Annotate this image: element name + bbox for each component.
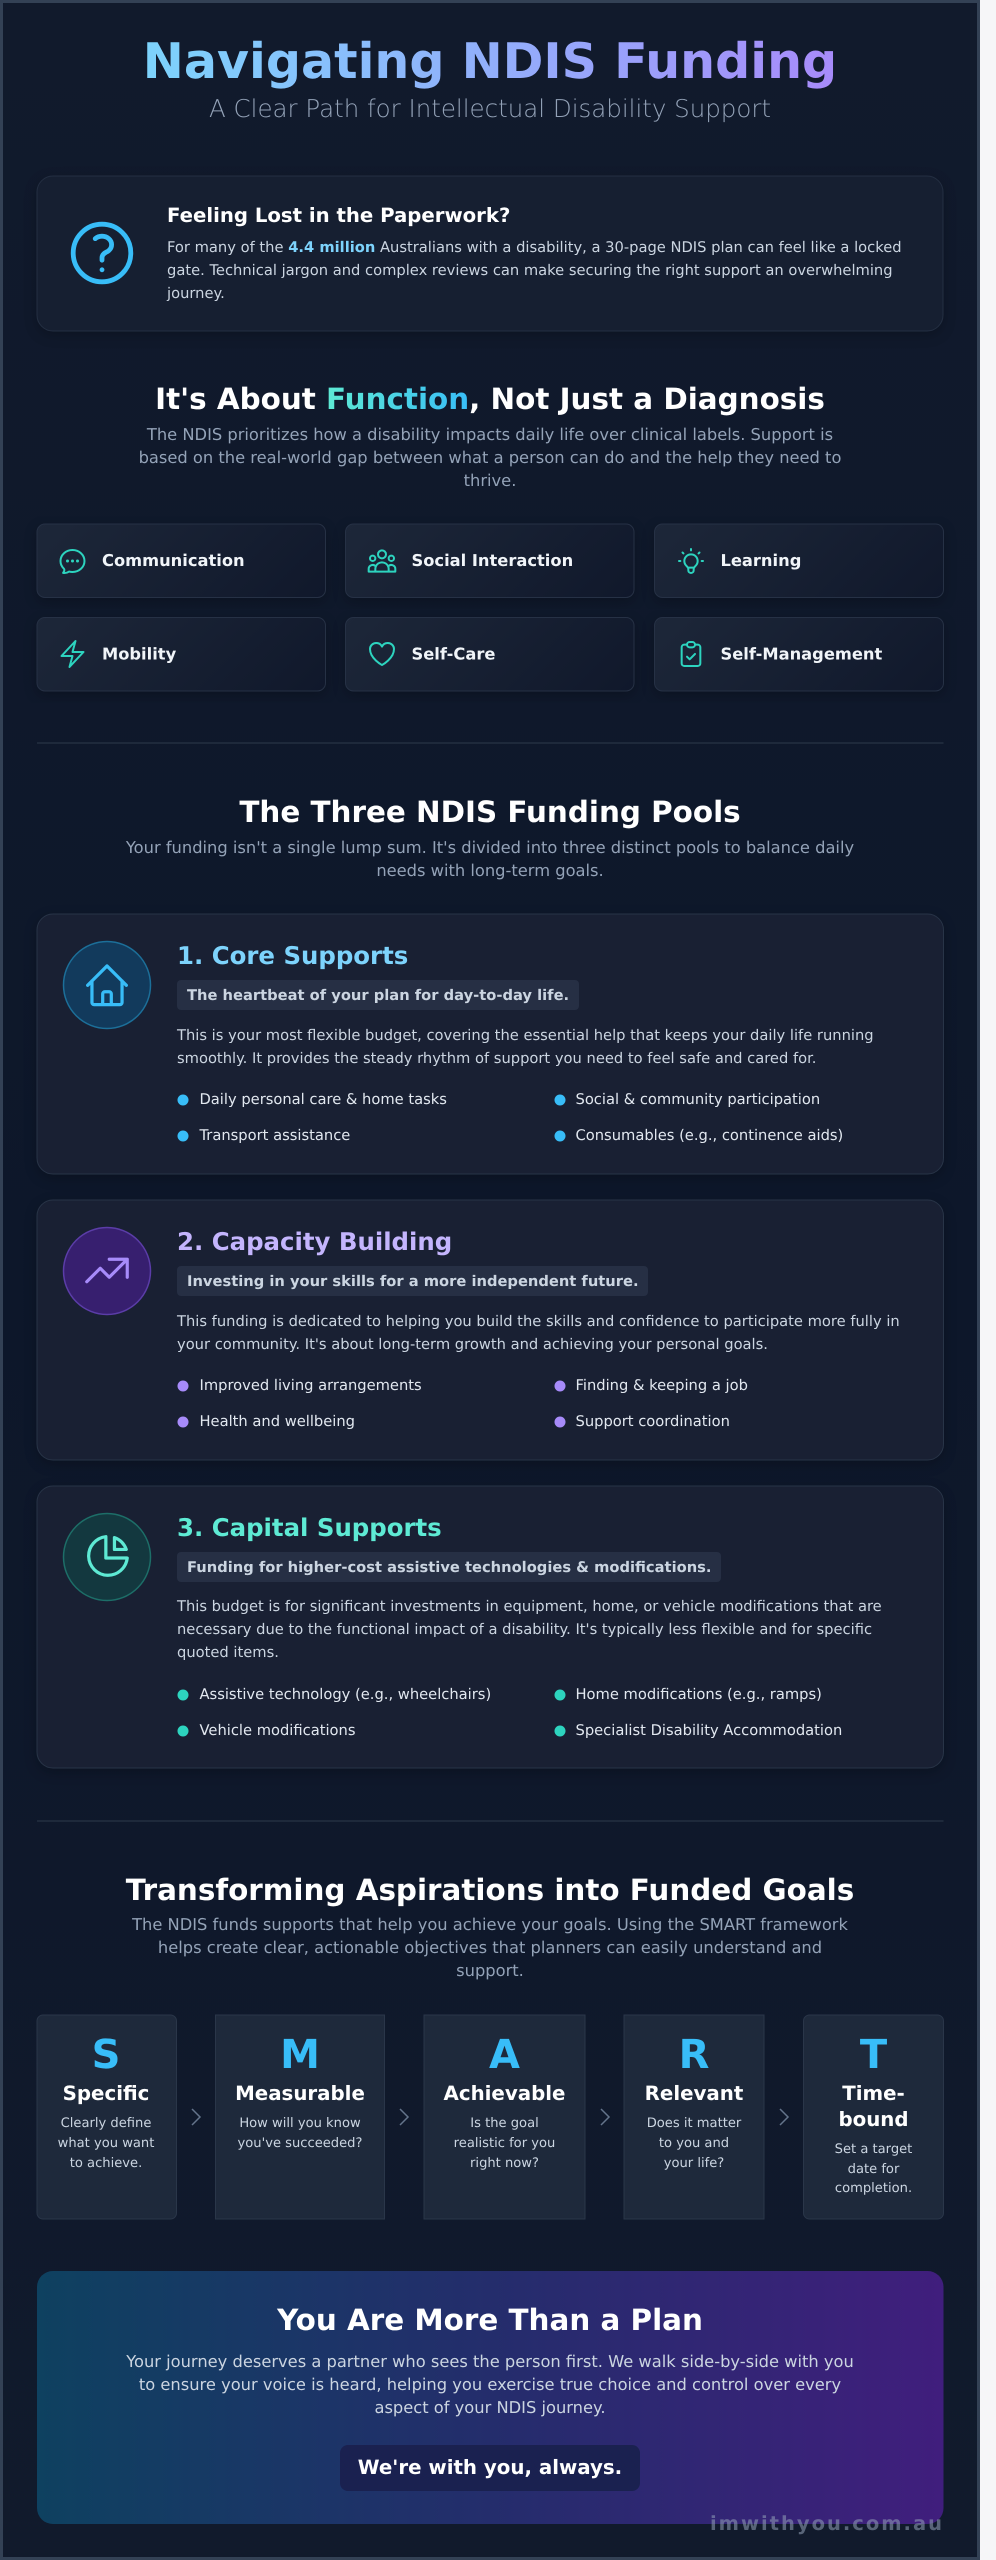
card: self-management — [654, 618, 944, 691]
icon: home — [64, 942, 150, 1028]
text: capacity building body: your community. It's about long-term growth and achieving your personal goals. — [177, 1336, 768, 1353]
text: funding pools intro: needs with long-term goals. — [376, 861, 604, 880]
list: capacity building items: Finding & keeping a job — [576, 1377, 748, 1394]
label: self-care: Self-Care — [412, 644, 495, 664]
panel: call to action — [37, 2271, 944, 2524]
label: mobility: Mobility — [102, 644, 177, 664]
watermark: imwithyou.com.au — [710, 2512, 944, 2535]
text: capacity building body: This funding is dedicated to helping you build the skills and confidence to participate more fully in — [176, 1313, 900, 1330]
card: M measurable: Measurable — [235, 2082, 365, 2105]
heading: funding pools: The Three NDIS Funding Pools — [239, 795, 741, 829]
tagline: capacity building: Investing in your skills for a more independent future. — [187, 1273, 639, 1290]
label: communication: Communication — [102, 551, 245, 570]
text: capital supports body — [176, 1598, 882, 1661]
card: A achievable: A — [489, 2032, 520, 2078]
card: learning — [654, 524, 944, 598]
card: A achievable: Achievable — [444, 2082, 565, 2105]
card: communication — [37, 524, 326, 598]
panel: capital supports — [37, 1486, 944, 1768]
card: A achievable: Is the goal — [470, 2116, 539, 2131]
card: M measurable: you've succeeded? — [238, 2136, 362, 2151]
list: core supports items: Social & community participation — [576, 1091, 820, 1108]
text: feeling lost body: gate. Technical jargon and complex reviews can make securing the right support an overwhelming — [167, 262, 893, 279]
tagline: capacity building — [177, 1266, 648, 1296]
list: core supports items: Daily personal care & home tasks — [200, 1091, 447, 1108]
list: capital supports items: Home modifications (e.g., ramps) — [576, 1686, 822, 1703]
text: capital supports body: quoted items. — [177, 1644, 279, 1661]
icon: heart — [370, 643, 394, 665]
card: self-care — [346, 618, 634, 691]
card: S specific: to achieve. — [70, 2156, 142, 2171]
card: S specific: what you want — [58, 2136, 154, 2151]
text: function intro: thrive. — [464, 471, 516, 490]
text: smart intro: helps create clear, actionable objectives that planners can easily understand and — [158, 1938, 822, 1957]
card: T time-bound: date for — [848, 2162, 900, 2177]
text: core supports body: smoothly. It provides the steady rhythm of support you need to feel safe and cared for. — [177, 1050, 816, 1067]
text: call to action body: to ensure your voice is heard, helping you exercise true choice and control over every — [139, 2375, 841, 2394]
label: social interaction: Social Interaction — [412, 551, 573, 570]
card: S specific: Clearly define — [61, 2116, 151, 2131]
card: T time-bound: Time- — [842, 2082, 905, 2105]
heading: feeling lost: Feeling Lost in the Paperwork? — [167, 204, 510, 227]
card: A achievable: realistic for you — [454, 2136, 555, 2151]
card: A achievable: right now? — [470, 2156, 539, 2171]
icon: trending up — [64, 1228, 150, 1314]
text: feeling lost body: journey. — [166, 285, 225, 302]
button: with you always — [340, 2445, 640, 2491]
card: M measurable — [216, 2015, 384, 2219]
panel: core supports — [37, 914, 944, 1174]
label: learning: Learning — [720, 551, 801, 570]
card: T time-bound: Set a target — [835, 2142, 912, 2157]
text: call to action body — [125, 2352, 854, 2417]
icon: question mark — [73, 224, 131, 282]
title: Navigating NDIS Funding — [143, 32, 837, 90]
icon: clipboard check — [682, 642, 700, 666]
arrow: M to A — [400, 2109, 408, 2125]
card: T time-bound — [804, 2015, 944, 2219]
icon: chat bubble — [60, 550, 84, 573]
tagline: core supports: The heartbeat of your plan for day-to-day life. — [187, 987, 569, 1004]
list: capacity building items: Improved living arrangements — [200, 1377, 422, 1394]
text: capital supports body: necessary due to the functional impact of a disability. It's typically less flexible and for specific — [177, 1621, 872, 1638]
list: capital supports items — [178, 1686, 842, 1739]
card: R relevant: Relevant — [645, 2082, 743, 2105]
text: function intro — [139, 425, 841, 490]
tagline: core supports — [177, 980, 579, 1010]
text: smart intro: The NDIS funds supports that help you achieve your goals. Using the SMART framework — [131, 1915, 848, 1934]
panel: capacity building — [37, 1200, 944, 1460]
card: S specific — [37, 2015, 176, 2219]
text: capital supports body: This budget is for significant investments in equipment, home, or vehicle modifications that are — [176, 1598, 882, 1615]
card: M measurable: M — [280, 2032, 320, 2078]
card: T time-bound: completion. — [835, 2181, 912, 2196]
text: call to action body: Your journey deserves a partner who sees the person first. We walk side-by-side with you — [125, 2352, 854, 2371]
card: social interaction — [346, 524, 634, 598]
card: T time-bound: bound — [838, 2108, 909, 2131]
card: mobility — [37, 618, 326, 691]
icon: bolt — [61, 641, 83, 667]
icon: light bulb — [679, 549, 703, 573]
list: capital supports items: Vehicle modifications — [200, 1722, 356, 1739]
card: R relevant — [624, 2015, 764, 2219]
heading: core supports: 1. Core Supports — [177, 941, 408, 970]
icon: pie chart — [64, 1514, 150, 1600]
tagline: capital supports: Funding for higher-cost assistive technologies & modifications. — [187, 1559, 711, 1576]
text: smart intro: support. — [456, 1961, 524, 1980]
text: function intro: The NDIS prioritizes how a disability impacts daily life over clinical labels. Support is — [146, 425, 833, 444]
text: funding pools intro — [125, 838, 854, 880]
text: call to action body: aspect of your NDIS journey. — [374, 2398, 606, 2417]
heading: more than a plan: You Are More Than a Plan — [276, 2303, 703, 2337]
text: core supports body — [176, 1027, 874, 1067]
card: R relevant: your life? — [664, 2156, 724, 2171]
list: capacity building items — [178, 1377, 748, 1430]
icon: people — [369, 550, 395, 572]
arrow: R to T — [780, 2109, 788, 2125]
card: M measurable: How will you know — [239, 2116, 361, 2131]
text: capacity building body — [176, 1313, 900, 1353]
subtitle: A Clear Path for Intellectual Disability Support — [209, 94, 771, 123]
text: feeling lost body: For many of the 4.4 million Australians with a disability, a 30-page NDIS plan can feel like a locked — [167, 239, 902, 256]
button: with you always: We're with you, always. — [358, 2456, 622, 2479]
card: R relevant: to you and — [659, 2136, 729, 2151]
list: core supports items: Transport assistance — [198, 1127, 350, 1144]
card: R relevant: R — [679, 2032, 709, 2078]
list: core supports items — [178, 1091, 843, 1144]
list: capacity building items: Support coordination — [576, 1413, 730, 1430]
card: T time-bound: T — [860, 2032, 888, 2078]
list: capital supports items: Specialist Disability Accommodation — [576, 1722, 842, 1739]
heading: smart goals: Transforming Aspirations into Funded Goals — [126, 1873, 854, 1907]
card: S specific: Specific — [63, 2082, 149, 2105]
card: A achievable — [424, 2015, 585, 2219]
label: self-management: Self-Management — [720, 644, 882, 664]
panel: feeling lost — [37, 176, 943, 331]
list: capital supports items: Assistive technology (e.g., wheelchairs) — [200, 1686, 491, 1703]
list: core supports items: Consumables (e.g., continence aids) — [576, 1127, 843, 1144]
card: R relevant: Does it matter — [647, 2116, 742, 2131]
heading: function: It's About Function, Not Just a Diagnosis — [155, 382, 825, 416]
list: capacity building items: Health and wellbeing — [200, 1413, 355, 1430]
card: S specific: S — [92, 2032, 120, 2078]
arrow: S to M — [192, 2109, 200, 2125]
heading: capacity building: 2. Capacity Building — [177, 1227, 452, 1256]
text: smart intro — [131, 1915, 848, 1980]
tagline: capital supports — [177, 1552, 721, 1582]
text: funding pools intro: Your funding isn't a single lump sum. It's divided into three distinct pools to balance daily — [125, 838, 854, 857]
text: function intro: based on the real-world gap between what a person can do and the help they need to — [139, 448, 841, 467]
text: core supports body: This is your most flexible budget, covering the essential help that keeps your daily life running — [176, 1027, 874, 1044]
text: feeling lost body — [166, 239, 902, 302]
heading: capital supports: 3. Capital Supports — [177, 1513, 442, 1542]
arrow: A to R — [601, 2109, 609, 2125]
